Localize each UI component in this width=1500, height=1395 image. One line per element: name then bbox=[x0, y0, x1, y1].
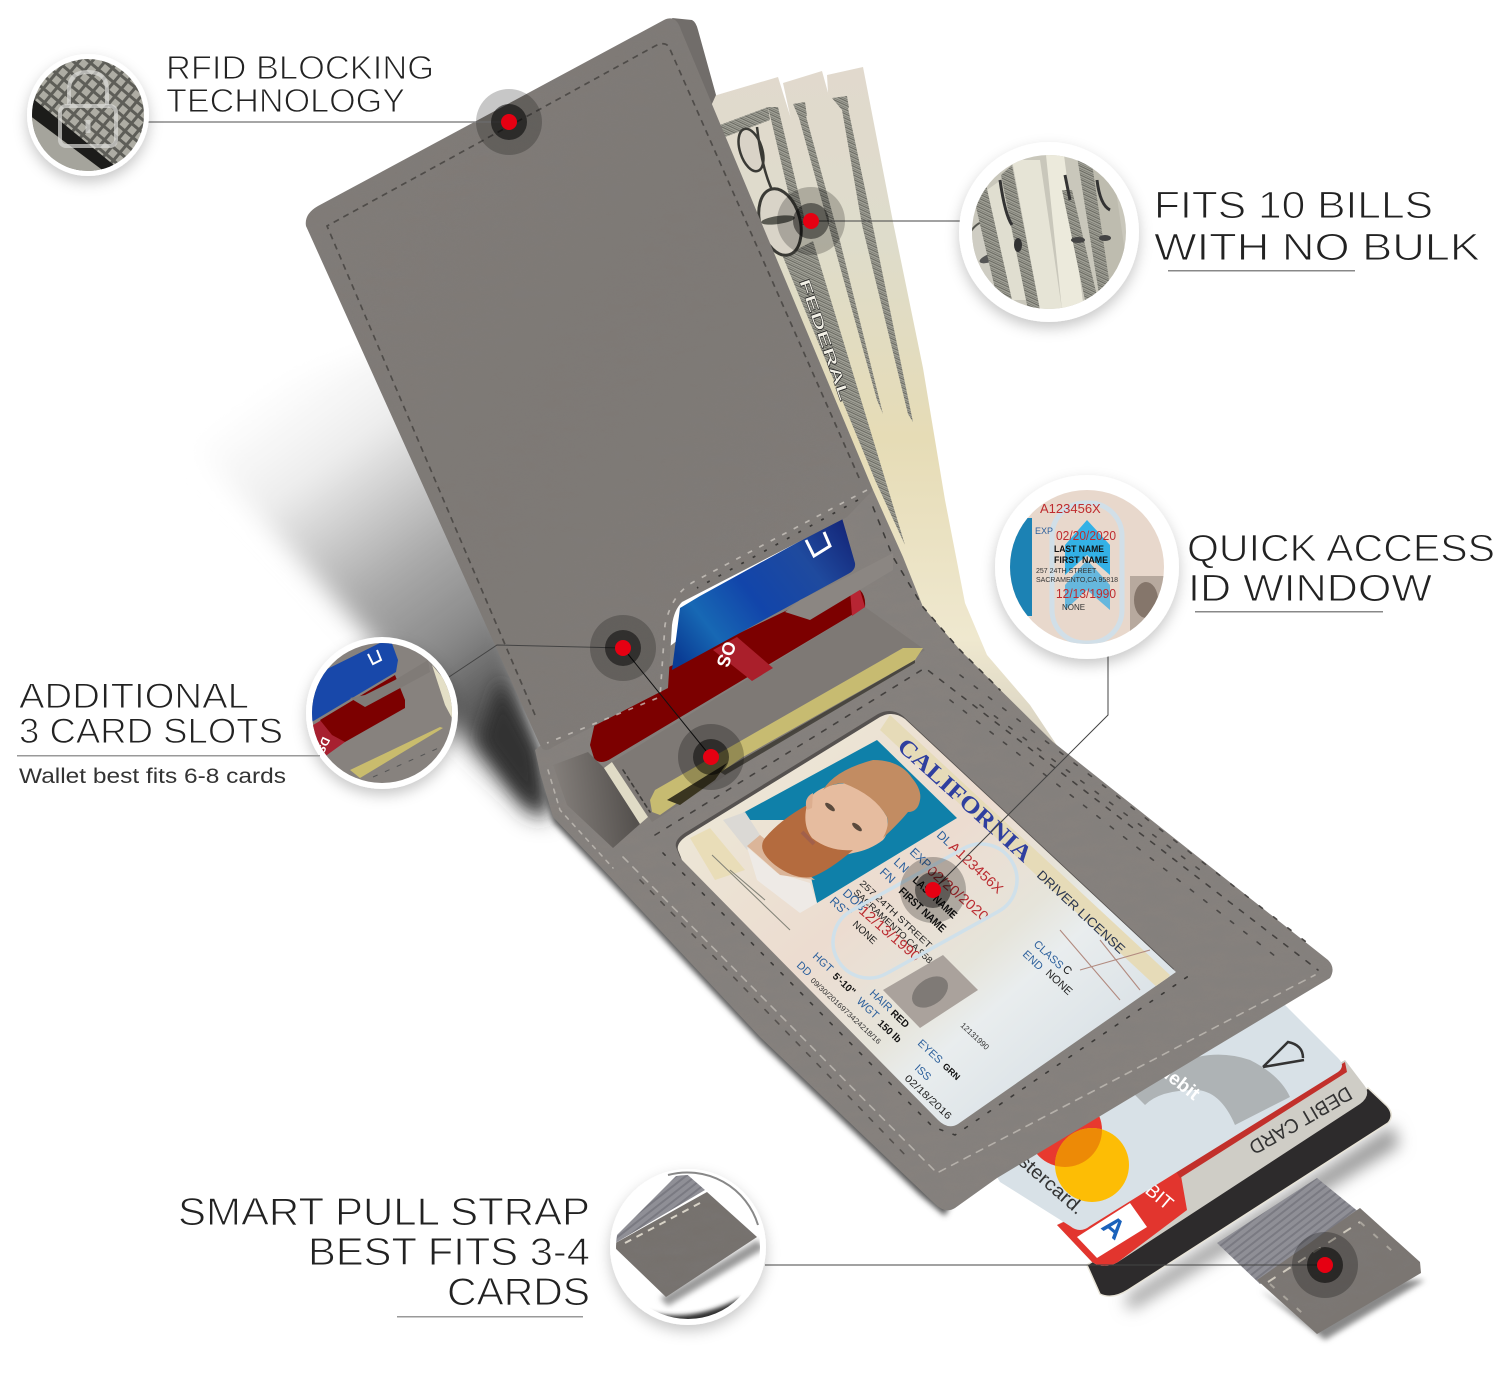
ID fields: C bbox=[1060, 963, 1074, 978]
ID fields: END bbox=[1020, 948, 1045, 973]
ID fields: FN bbox=[877, 865, 898, 886]
ID fields: NONE bbox=[1043, 967, 1074, 998]
inset: ID window: EXP bbox=[1035, 526, 1053, 536]
inset: card slots: DS bbox=[313, 735, 333, 756]
ID window frame bbox=[676, 711, 1174, 1123]
silver mastercard card bbox=[997, 1003, 1342, 1230]
wallet stitching bbox=[548, 507, 1318, 1173]
heading: strap: SMART PULL STRAP bbox=[178, 1191, 590, 1234]
inset: ID window: FIRST NAME bbox=[1054, 555, 1108, 565]
ID portrait bbox=[762, 760, 920, 878]
ID fields: A123456X bbox=[946, 838, 1007, 897]
heading: card slots bbox=[17, 677, 320, 788]
ID fields: 12/13/1990 bbox=[856, 902, 924, 964]
gold card in slot bbox=[650, 648, 923, 815]
inset: ID window: LAST NAME bbox=[1054, 544, 1104, 554]
marker: gold slot bbox=[678, 724, 744, 790]
wallet drop shadow bbox=[170, 340, 1425, 1340]
gray slot lip bbox=[785, 553, 893, 620]
heading: strap bbox=[178, 1191, 590, 1318]
heading: ID window: ID WINDOW bbox=[1188, 568, 1432, 610]
debit card bbox=[1057, 1060, 1367, 1266]
ID fields: DRIVER LICENSE bbox=[1034, 867, 1129, 957]
marker: strap bbox=[1292, 1232, 1358, 1298]
ID fields: 02/18/2016 bbox=[902, 1073, 954, 1122]
ID fields: EYES bbox=[915, 1037, 945, 1066]
ID fields: RST bbox=[827, 894, 855, 921]
ID fields: HAIR bbox=[867, 987, 894, 1014]
marker: flap slots bbox=[590, 615, 656, 681]
ID fields: EXP bbox=[907, 845, 934, 872]
inset: ID window bbox=[995, 475, 1179, 659]
blue card bbox=[672, 518, 893, 670]
ID fields: FIRST NAME bbox=[896, 885, 948, 935]
ID heading: CALIFORNIA bbox=[893, 733, 1038, 867]
heading: strap: CARDS bbox=[447, 1271, 590, 1314]
ID fields: RED bbox=[888, 1008, 911, 1031]
strap leather tab bbox=[1257, 1208, 1421, 1334]
red card bbox=[590, 580, 865, 762]
icon: padlock bbox=[60, 72, 116, 146]
bill portrait numerals bbox=[734, 126, 808, 260]
subheading: Wallet best fits 6-8 cards bbox=[19, 765, 286, 788]
hologram oval bbox=[831, 842, 1019, 980]
mastercard logo bbox=[1037, 1116, 1129, 1202]
heading: RFID bbox=[166, 49, 434, 119]
wallet lower body bbox=[535, 490, 1333, 1210]
ID fields bbox=[794, 828, 1129, 1122]
ID fields: 02/20/2020 bbox=[924, 862, 992, 924]
debit card: DEBIT CARD bbox=[1245, 1082, 1356, 1158]
heading: bills bbox=[1154, 185, 1480, 272]
heading: ID window bbox=[1187, 528, 1495, 612]
inset: card slots bbox=[305, 637, 460, 790]
inset: ID window: 02/20/2020 bbox=[1056, 528, 1116, 543]
ID fields: DD bbox=[794, 959, 814, 979]
California ID card bbox=[678, 714, 1176, 1126]
ID fields: LAST NAME bbox=[910, 874, 959, 921]
debit card: BIT bbox=[1141, 1180, 1177, 1215]
heading: ID window: QUICK ACCESS bbox=[1187, 528, 1495, 570]
ID fields: WGT bbox=[854, 995, 881, 1022]
banknotes bbox=[700, 67, 1060, 750]
silver mastercard card: stercard. bbox=[1014, 1151, 1088, 1219]
ID fields: GRN bbox=[941, 1061, 962, 1082]
ID fields: 257 24TH STREET bbox=[858, 878, 934, 951]
inset: bills bbox=[959, 142, 1139, 322]
ID fields: SACRAMENTO,CA 95818 bbox=[852, 887, 943, 973]
heading: card slots: ADDITIONAL bbox=[19, 677, 249, 716]
dark pocket interior bbox=[553, 752, 640, 848]
inset: strap bbox=[610, 1169, 766, 1325]
flap bbox=[306, 18, 873, 750]
ID fields: CLASS bbox=[1031, 938, 1066, 972]
heading: RFID: TECHNOLOGY bbox=[166, 82, 405, 119]
inset: ID window: A123456X bbox=[1040, 501, 1101, 516]
pull strap bbox=[1217, 1178, 1421, 1334]
red card: OS bbox=[712, 639, 740, 670]
ID fields: NONE bbox=[850, 919, 879, 947]
heading: RFID: RFID BLOCKING bbox=[166, 49, 434, 86]
shirt and neck bbox=[723, 812, 817, 913]
marker: ID window bbox=[900, 857, 966, 923]
inset: ID window: 12/13/1990 bbox=[1056, 586, 1116, 601]
heading: bills: WITH NO BULK bbox=[1154, 227, 1480, 269]
callout lines bbox=[148, 122, 1325, 1265]
black card bbox=[1087, 1088, 1391, 1296]
ID fields: 150 lb bbox=[875, 1018, 903, 1046]
ghost photo bbox=[883, 955, 978, 1028]
heading: strap: BEST FITS 3-4 bbox=[308, 1231, 590, 1274]
marker: bills bbox=[777, 187, 845, 255]
inner pocket panel bbox=[612, 607, 925, 822]
heading: bills: FITS 10 BILLS bbox=[1154, 185, 1433, 227]
marker: RFID bbox=[476, 89, 542, 155]
ID fields: DOB bbox=[840, 886, 869, 914]
ID fields: LN bbox=[891, 855, 912, 876]
ID fields: 09/30/2016973424218/16 bbox=[809, 976, 883, 1046]
banknotes: FEDERAL bbox=[795, 277, 853, 403]
ID fields: HGT bbox=[810, 950, 835, 975]
heading: card slots: 3 CARD SLOTS bbox=[19, 712, 283, 751]
inset: ID window: NONE bbox=[1062, 603, 1085, 612]
ID fields: 12131990 bbox=[959, 1021, 991, 1052]
inset: ID window: 257 24TH STREET bbox=[1036, 568, 1097, 575]
ID fields: ISS bbox=[912, 1062, 933, 1083]
flap stitching bbox=[327, 44, 867, 743]
inset: RFID lock bbox=[25, 54, 155, 176]
ID fields: DL bbox=[934, 828, 955, 849]
inset: ID window: SACRAMENTO,CA 95818 bbox=[1036, 577, 1118, 584]
debit card: A bbox=[1096, 1209, 1132, 1246]
silver mastercard card: debit bbox=[1155, 1060, 1204, 1105]
ID photo background bbox=[730, 740, 957, 903]
ID fields: 5'-10" bbox=[830, 971, 857, 998]
